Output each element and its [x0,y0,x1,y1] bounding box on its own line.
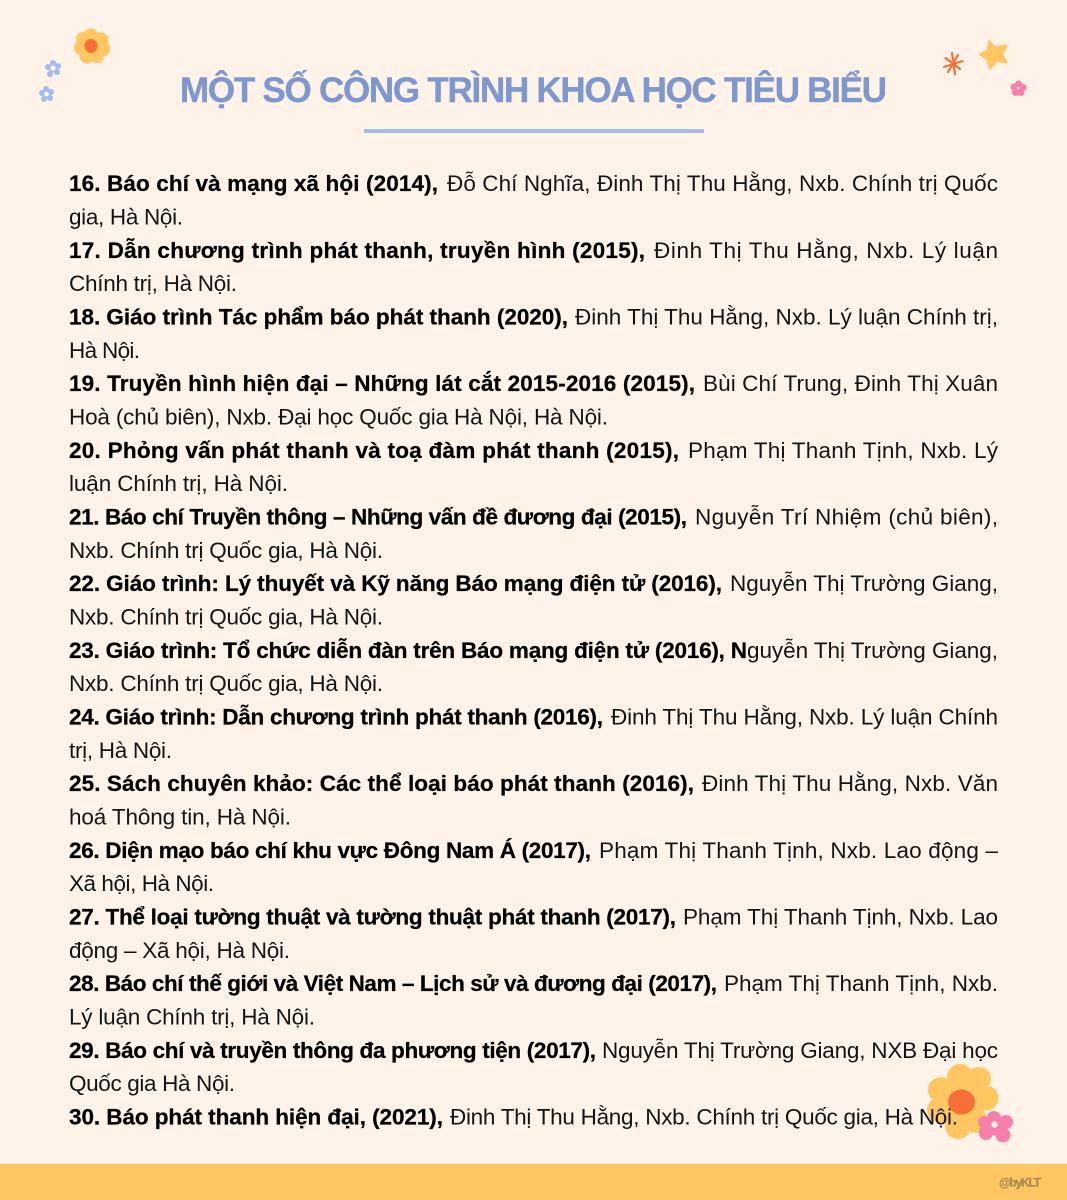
entry 18: Đinh Thị Thu Hằng, Nxb. Lý luận Chính trị, [575,304,998,329]
entry 17 [69,238,998,296]
entry 20: 20. Phỏng vấn phát thanh và toạ đàm phát thanh (2015), [69,438,679,463]
entry 19 [69,371,998,430]
entry 24 [69,704,998,763]
entry 22: Nguyễn Thị Trường Giang, [730,571,998,596]
entry 23: 23. Giáo trình: Tổ chức diễn đàn trên Báo mạng điện tử (2016), N [69,638,747,663]
entry 26: Xã hội, Hà Nội. [69,871,214,896]
entry 27: động – Xã hội, Hà Nội. [69,938,290,963]
entry 20: Phạm Thị Thanh Tịnh, Nxb. Lý [688,438,999,463]
entry 29: 29. Báo chí và truyền thông đa phương tiện (2017), [69,1038,596,1063]
entry 16 [69,171,998,230]
entry 21: Nxb. Chính trị Quốc gia, Hà Nội. [69,538,383,563]
publication list [69,171,999,1129]
entry 22 [69,571,998,630]
footer band [0,1164,1067,1200]
title underline [364,129,704,133]
entry 20: luận Chính trị, Hà Nội. [69,471,288,496]
entry 17: Chính trị, Hà Nội. [69,271,237,296]
entry 22: Nxb. Chính trị Quốc gia, Hà Nội. [69,604,383,629]
icon: blue flower upper [45,60,61,77]
footer credit: @byKLT [999,1176,1042,1190]
entry 16: 16. Báo chí và mạng xã hội (2014), [69,171,438,196]
entry 16: Đỗ Chí Nghĩa, Đinh Thị Thu Hằng, Nxb. Chính trị Quốc [447,171,998,196]
entry 24: trị, Hà Nội. [69,738,172,763]
entry 17: 17. Dẫn chương trình phát thanh, truyền hình (2015), [69,238,645,263]
entry 25: hoá Thông tin, Hà Nội. [69,804,291,829]
entry 29: Quốc gia Hà Nội. [69,1071,235,1096]
entry 30 [69,1104,958,1130]
entry 19: Bùi Chí Trung, Đinh Thị Xuân [703,371,998,396]
title: MỘT SỐ CÔNG TRÌNH KHOA HỌC TIÊU BIỂU [180,70,887,110]
entry 25: 25. Sách chuyên khảo: Các thể loại báo phát thanh (2016), [69,771,694,796]
entry 26: Phạm Thị Thanh Tịnh, Nxb. Lao động – [599,838,998,863]
entry 29 [69,1038,998,1096]
entry 21: 21. Báo chí Truyền thông – Những vấn đề đương đại (2015), [69,504,687,529]
entry 23: guyễn Thị Trường Giang, [747,638,998,663]
entry 30: Đinh Thị Thu Hằng, Nxb. Chính trị Quốc gia, Hà Nội. [450,1105,958,1130]
entry 16: gia, Hà Nội. [69,205,183,230]
entry 30: 30. Báo phát thanh hiện đại, (2021), [69,1105,443,1130]
entry 21: Nguyễn Trí Nhiệm (chủ biên), [695,504,998,529]
entry 25: Đinh Thị Thu Hằng, Nxb. Văn [702,771,998,796]
entry 17: Đinh Thị Thu Hằng, Nxb. Lý luận [654,238,998,263]
entry 20 [69,438,999,496]
entry 28: Lý luận Chính trị, Hà Nội. [69,1005,315,1030]
icon: large pink flower [978,1111,1013,1142]
entry 21 [69,504,998,563]
icon: small pink flower [1010,80,1026,96]
entry 18: Hà Nội. [69,338,140,363]
entry 18: 18. Giáo trình Tác phẩm báo phát thanh (2020), [69,304,568,329]
entry 24: Đinh Thị Thu Hằng, Nxb. Lý luận Chính [611,704,998,729]
entry 26: 26. Diện mạo báo chí khu vực Đông Nam Á (2017), [69,838,591,863]
icon: orange flower top left [74,28,110,64]
entry 19: 19. Truyền hình hiện đại – Những lát cắt 2015-2016 (2015), [69,371,695,396]
entry 28: 28. Báo chí thế giới và Việt Nam – Lịch sử và đương đại (2017), [69,971,717,996]
entry 24: 24. Giáo trình: Dẫn chương trình phát thanh (2016), [69,704,603,729]
entry 22: 22. Giáo trình: Lý thuyết và Kỹ năng Báo mạng điện tử (2016), [69,571,722,596]
entry 18 [69,304,998,363]
entry 27: 27. Thể loại tường thuật và tường thuật phát thanh (2017), [69,904,676,929]
entry 23 [69,638,998,696]
entry 23: Nxb. Chính trị Quốc gia, Hà Nội. [69,671,383,696]
entry 19: Hoà (chủ biên), Nxb. Đại học Quốc gia Hà Nội, Hà Nội. [69,404,608,429]
entry 27 [69,904,998,963]
icon: blue flower lower [39,86,54,102]
entry 28: Phạm Thị Thanh Tịnh, Nxb. [724,971,998,996]
icon: large yellow flower [927,1064,998,1139]
entry 29: Nguyễn Thị Trường Giang, NXB Đại học [602,1038,998,1063]
icon: orange asterisk [944,53,962,74]
entry 25 [69,771,998,830]
icon: yellow star [980,41,1006,68]
entry 28 [69,971,998,1030]
entry 27: Phạm Thị Thanh Tịnh, Nxb. Lao [683,904,998,929]
entry 26 [69,838,998,896]
